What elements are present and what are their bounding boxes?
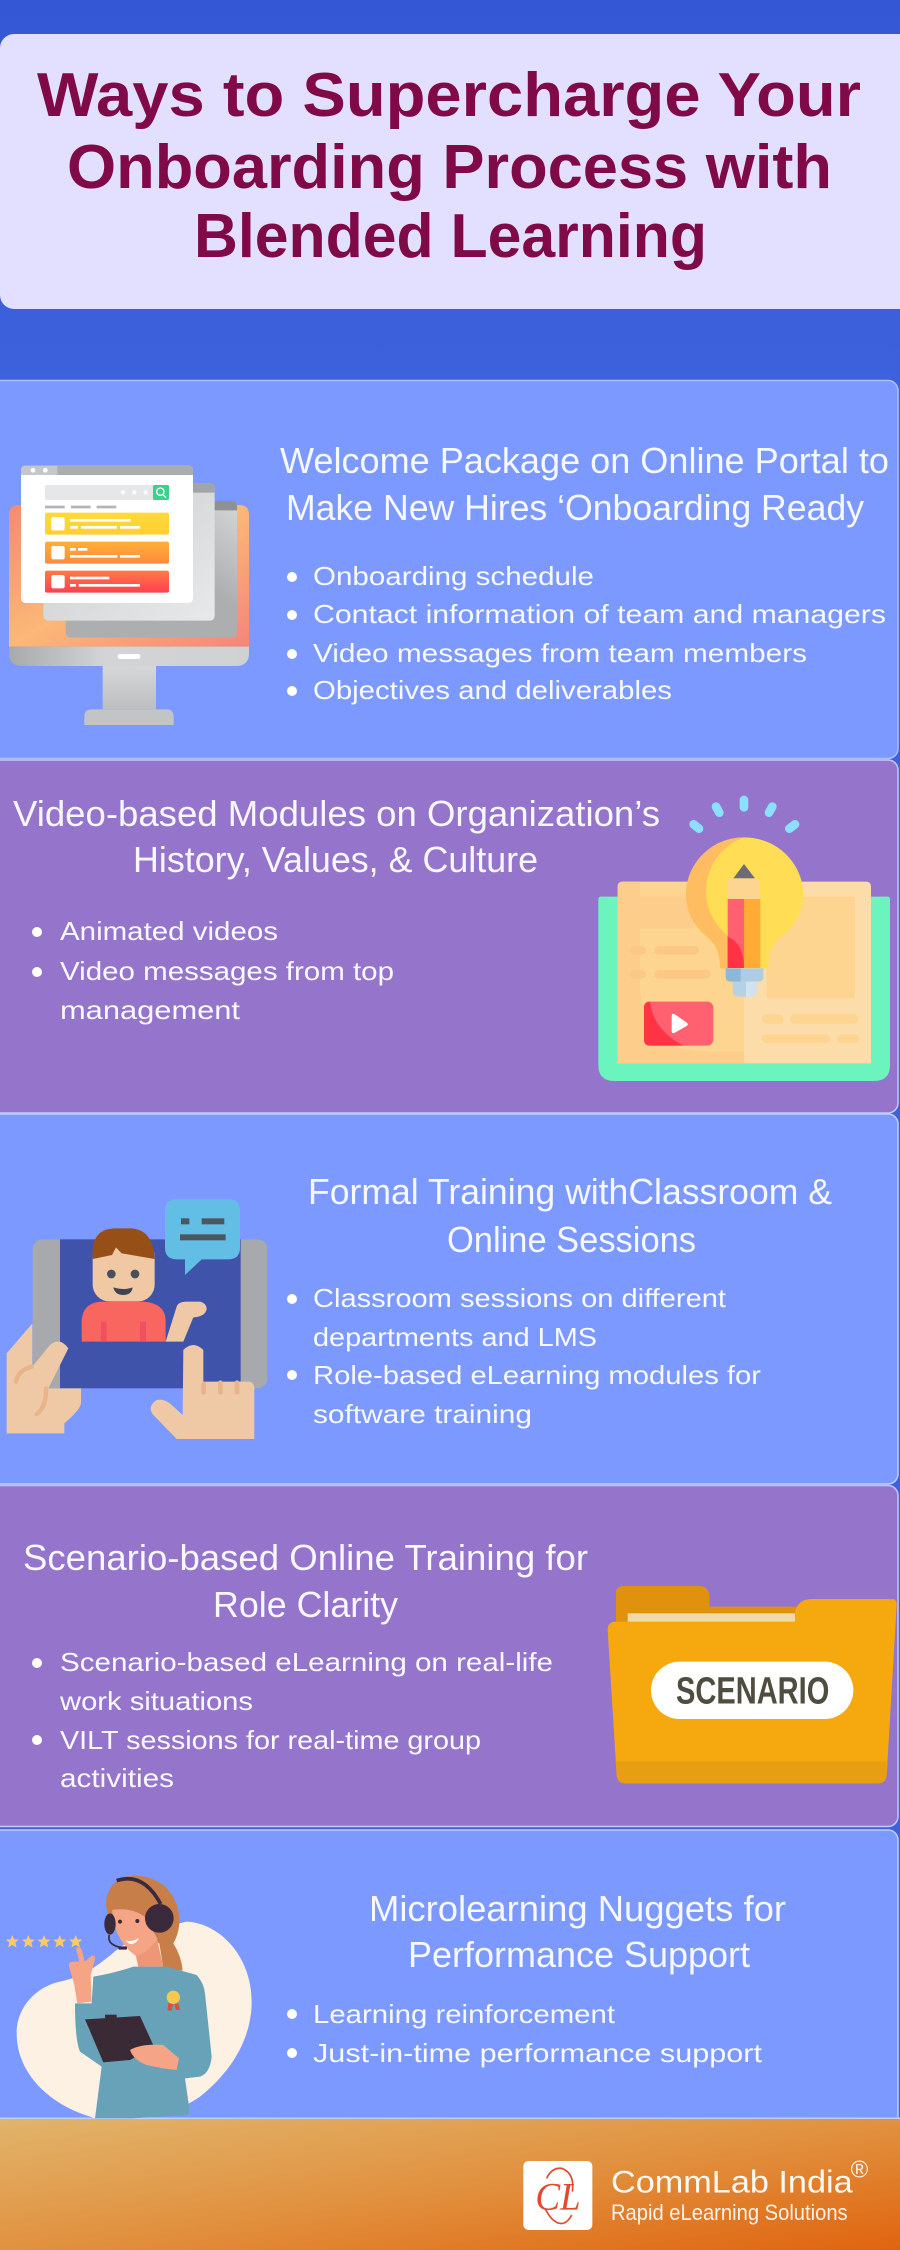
title: [37, 61, 861, 271]
bullet list: formal training: Role-based eLearning modules for: [313, 1360, 761, 1390]
logo mark: [523, 2161, 592, 2230]
bullet list: microlearning: [287, 1999, 763, 2068]
bullet list: scenario training: Scenario-based eLearning on real-life: [60, 1647, 553, 1677]
company name: CommLab India: [611, 2164, 853, 2200]
heading: welcome package: Welcome Package on Online Portal to: [280, 440, 889, 481]
bullet list: welcome package: Objectives and deliverables: [313, 675, 672, 705]
bullet list: formal training: [287, 1283, 761, 1429]
bullet list: video modules: Video messages from top: [60, 956, 394, 986]
bullet list: microlearning: Learning reinforcement: [313, 1999, 616, 2029]
icon: woman with headset and clipboard: [6, 1876, 252, 2118]
icon: desktop monitor with windows: [9, 466, 249, 725]
bullet list: video modules: management: [60, 995, 241, 1025]
registered mark: ®: [851, 2156, 869, 2183]
bullet list: scenario training: [32, 1647, 553, 1793]
bullet list: scenario training: work situations: [59, 1686, 253, 1716]
panel: formal training: [0, 1114, 898, 1484]
title panel: [0, 34, 900, 309]
heading: formal training: [308, 1171, 832, 1260]
logo: CommLab India: [523, 2156, 869, 2230]
bullet list: video modules: Animated videos: [60, 916, 278, 946]
bullet list: formal training: software training: [313, 1399, 532, 1429]
bullet list: formal training: Classroom sessions on different: [313, 1283, 727, 1313]
bullet list: formal training: departments and LMS: [313, 1322, 597, 1352]
heading: microlearning nuggets: [369, 1888, 786, 1975]
panel: video-based modules: [0, 760, 898, 1113]
heading: welcome package: Make New Hires ‘Onboarding Ready: [286, 487, 864, 528]
heading: microlearning nuggets: Microlearning Nuggets for: [369, 1888, 786, 1929]
bullet list: welcome package: Video messages from team members: [313, 638, 807, 668]
title: Onboarding Process with: [67, 133, 832, 202]
heading: welcome package: [280, 440, 889, 528]
panel: scenario-based training: [0, 1486, 898, 1826]
heading: scenario-based training: Role Clarity: [213, 1584, 398, 1625]
panel: welcome package: [0, 380, 898, 758]
bullet list: welcome package: [287, 561, 886, 705]
heading: scenario-based training: Scenario-based Online Training for: [23, 1537, 588, 1578]
icon: tablet video call with hands: [7, 1199, 267, 1439]
heading: video-based modules: [13, 793, 660, 880]
heading: scenario-based training: [23, 1537, 588, 1625]
bullet list: scenario training: activities: [60, 1763, 174, 1793]
icon: scenario folder: SCENARIO: [676, 1670, 829, 1712]
title: Blended Learning: [194, 202, 707, 271]
tagline: Rapid eLearning Solutions: [611, 2200, 848, 2225]
heading: video-based modules: History, Values, & Culture: [133, 839, 538, 880]
bullet list: microlearning: Just-in-time performance support: [313, 2038, 763, 2068]
bullet list: welcome package: Onboarding schedule: [313, 561, 594, 591]
heading: video-based modules: Video-based Modules on Organization’s: [13, 793, 660, 834]
logo mark: CL: [535, 2174, 581, 2218]
heading: formal training: Online Sessions: [447, 1219, 696, 1260]
heading: formal training: Formal Training withClassroom &: [308, 1171, 832, 1212]
title: Ways to Supercharge Your: [37, 61, 861, 130]
panel: microlearning nuggets: [0, 1830, 898, 2130]
icon: scenario folder: [608, 1586, 897, 1783]
bullet list: video modules: [32, 916, 394, 1025]
bullet list: scenario training: VILT sessions for real-time group: [60, 1725, 481, 1755]
bullet list: welcome package: Contact information of team and managers: [313, 599, 886, 629]
heading: microlearning nuggets: Performance Support: [408, 1934, 750, 1975]
icon: open book with lightbulb and pencil: [598, 800, 890, 1081]
footer band: [0, 2118, 900, 2250]
